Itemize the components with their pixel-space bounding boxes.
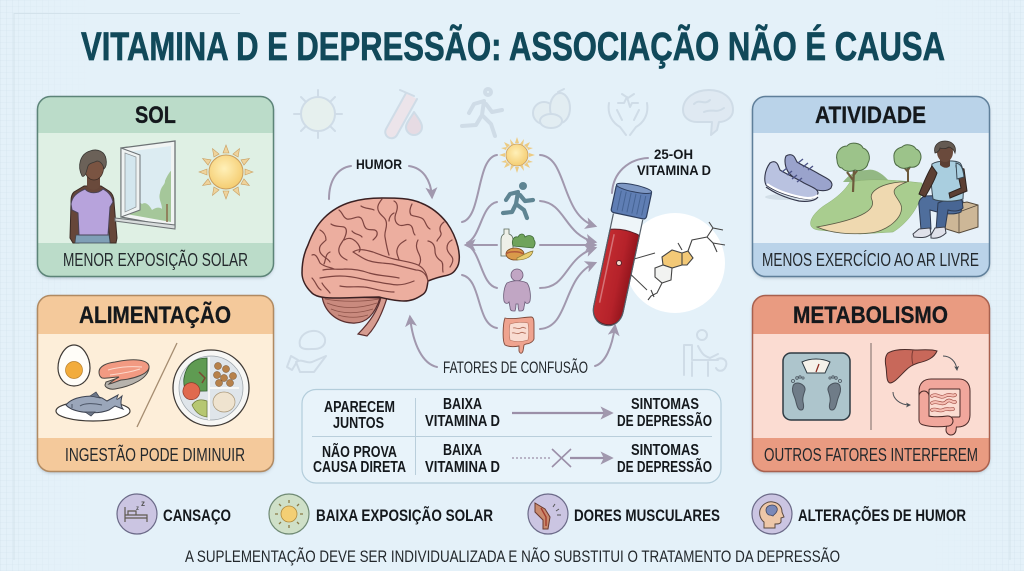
panel: metabolismo [752, 296, 990, 472]
legend: baixa exposicao solar [269, 494, 493, 534]
label: 25-oh vitamina d: VITAMINA D [637, 162, 711, 178]
marker: blood point [616, 260, 622, 266]
row: aparecem juntos: VITAMINA D [425, 413, 500, 430]
label: fatores de confusao: FATORES DE CONFUSÃO [443, 358, 588, 377]
icon: central runner [503, 182, 533, 218]
row: aparecem juntos: BAIXA [443, 396, 482, 413]
icon: central intestine [503, 317, 534, 353]
label: 25-oh vitamina d [637, 146, 711, 178]
caption: sol: MENOR EXPOSIÇÃO SOLAR [63, 249, 248, 270]
heading: atividade: ATIVIDADE [815, 102, 926, 129]
row: nao prova causa direta: BAIXA [443, 442, 482, 459]
row: nao prova causa direta: NÃO PROVA [322, 443, 397, 461]
arrow: crossed causal link [512, 449, 611, 467]
panel: alimentacao [38, 296, 274, 472]
arrows: metabolism [893, 356, 957, 405]
row: aparecem juntos: DE DEPRESSÃO [617, 412, 712, 430]
label: humor: HUMOR [356, 156, 402, 172]
icon: sneakers [765, 155, 832, 201]
row: aparecem juntos: JUNTOS [333, 415, 384, 432]
confounder arrows: left [462, 155, 497, 328]
row: aparecem juntos: SINTOMAS [631, 396, 699, 413]
row: nao prova causa direta: CAUSA DIRETA [313, 459, 406, 476]
heading: alimentacao: ALIMENTAÇÃO [79, 301, 231, 329]
divider: slash [137, 343, 177, 427]
arrow: association [512, 412, 611, 414]
caption: alimentacao: INGESTÃO PODE DIMINUIR [65, 444, 245, 465]
icon: central body [504, 269, 530, 311]
legend: cansaco [117, 494, 231, 534]
panel: sol [38, 96, 274, 276]
ghost icon: sun [294, 90, 342, 138]
panel: comparison table [302, 390, 721, 483]
confounder arrows: right [540, 155, 595, 329]
molecule callout [620, 213, 725, 313]
legend: cansaco: z [141, 499, 145, 508]
ghost icon: fruit [533, 89, 570, 128]
ghost icon: therapy [684, 330, 726, 376]
background ghost icons [287, 89, 733, 376]
icon: woman at window [70, 150, 117, 243]
icon: open window [115, 141, 175, 229]
legend: dores musculares [528, 494, 720, 534]
icon: salmon steak [99, 360, 149, 389]
icon: central sun [499, 137, 535, 173]
row: nao prova causa direta: DE DEPRESSÃO [617, 458, 712, 476]
ghost icon: brain [683, 90, 733, 135]
icon: liver [885, 349, 937, 383]
icon: blood tube [587, 181, 652, 329]
panel: atividade [752, 96, 990, 276]
icon: intestine [924, 384, 965, 430]
icon: egg [58, 345, 90, 386]
ghost icon: tube and drop [385, 90, 422, 138]
row: nao prova causa direta: VITAMINA D [425, 459, 500, 476]
legend: alteracoes de humor: ALTERAÇÕES DE HUMOR [798, 505, 966, 525]
legend: dores musculares: DORES MUSCULARES [574, 507, 720, 525]
icon: bathroom scale [783, 353, 850, 420]
icon: fish on plate [56, 392, 130, 421]
icon: seated person on box [913, 141, 978, 238]
ghost icon: hand holding brain [287, 331, 326, 372]
legend: baixa exposicao solar: BAIXA EXPOSIÇÃO SOLAR [316, 505, 493, 525]
label: 25-oh vitamina d: 25-OH [654, 146, 693, 162]
arrow: label to tube [612, 158, 648, 193]
row: aparecem juntos [324, 396, 712, 432]
ghost icon: hands with pulse [609, 94, 647, 135]
icon: plate [173, 350, 249, 426]
icon: brain [302, 198, 459, 336]
row: nao prova causa direta [313, 442, 712, 476]
row: aparecem juntos: APARECEM [324, 399, 395, 416]
heading: sol: SOL [135, 102, 176, 129]
arrows: humor [329, 166, 432, 199]
divider [870, 343, 872, 430]
icon: park path [811, 143, 922, 234]
legend: cansaco: CANSAÇO [163, 507, 231, 525]
row: nao prova causa direta: SINTOMAS [631, 442, 699, 459]
arrows: confounders feedback [410, 317, 615, 367]
legend: alteracoes de humor [752, 494, 966, 534]
icon: central food [501, 229, 535, 260]
icon: sun [199, 145, 253, 199]
legend: cansaco: z [136, 506, 139, 512]
heading: metabolismo: METABOLISMO [793, 302, 948, 329]
ghost icon: runner [462, 89, 502, 136]
footer note: A SUPLEMENTAÇÃO DEVE SER INDIVIDUALIZADA E NÃO SUBSTITUI O TRATAMENTO DA DEPRESSÃO [185, 546, 840, 566]
